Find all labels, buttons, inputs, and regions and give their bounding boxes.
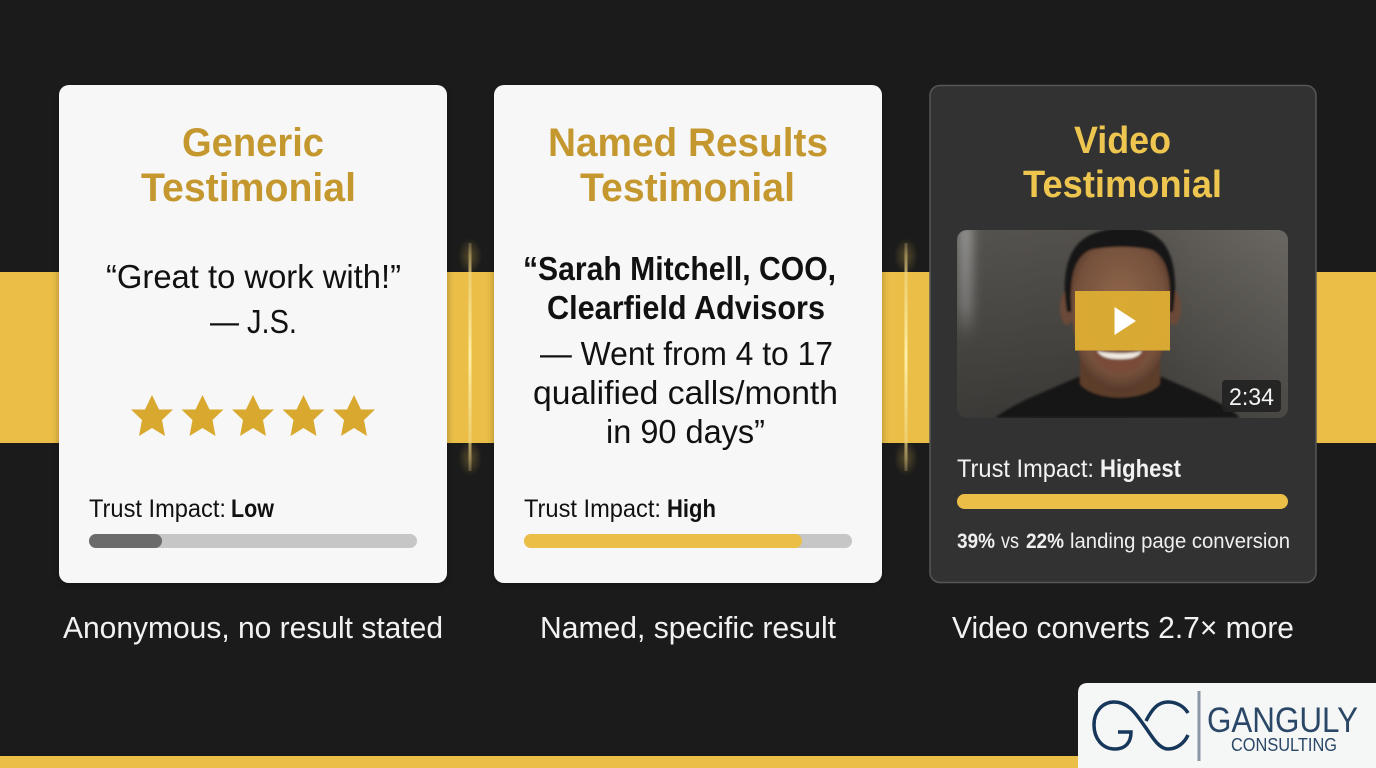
heading: named results testimonial: Testimonial [580, 166, 795, 210]
quote: great to work with [106, 258, 401, 340]
quote: great to work with: “Great to work with!” [106, 258, 401, 295]
logo divider [1198, 691, 1200, 761]
caption: generic: Anonymous, no result stated [63, 610, 443, 645]
icon: play button [1075, 291, 1170, 350]
logo wordmark: GANGULY [1207, 701, 1358, 740]
panel: named results testimonial [494, 85, 882, 583]
heading: named results testimonial [548, 121, 828, 210]
duration badge [1222, 380, 1281, 412]
conversion statistic [957, 530, 1290, 553]
logo wordmark: CONSULTING [1231, 735, 1337, 755]
connector glow between cards 1 and 2 [458, 238, 482, 476]
trust impact label: highest: Trust Impact: [957, 455, 1094, 483]
heading: generic testimonial: Generic [182, 121, 324, 165]
trust bar: highest [957, 494, 1288, 509]
icon: five stars [131, 395, 375, 436]
heading: video testimonial: Video [1074, 120, 1171, 162]
conversion statistic: 39% [957, 530, 995, 553]
quote: sarah mitchell: — Went from 4 to 17 [540, 335, 833, 372]
conversion statistic: landing page conversion [1070, 530, 1290, 553]
heading: named results testimonial: Named Results [548, 121, 828, 165]
trust impact label: highest [957, 455, 1182, 483]
heading: generic testimonial [141, 121, 356, 210]
logo wordmark [1207, 701, 1358, 755]
heading: video testimonial [1023, 120, 1222, 206]
heading: video testimonial: Testimonial [1023, 164, 1222, 206]
quote: sarah mitchell [523, 250, 838, 450]
panel: generic testimonial [59, 85, 447, 583]
quote: sarah mitchell: in 90 days” [606, 413, 765, 450]
caption: named: Named, specific result [540, 610, 836, 645]
trust bar: low [89, 534, 417, 548]
conversion statistic: 22% [1026, 530, 1064, 553]
quote: sarah mitchell: Clearfield Advisors [547, 289, 825, 326]
horizontal gold band [0, 272, 1376, 443]
connector glow between cards 2 and 3 [894, 238, 918, 476]
logo: ganguly consulting [1078, 683, 1376, 768]
trust bar: high [524, 534, 852, 548]
trust impact label: high: Trust Impact: [524, 495, 661, 523]
duration badge: 2:34 [1229, 384, 1274, 411]
bottom gold strip [0, 756, 1090, 768]
quote: sarah mitchell: “Sarah Mitchell, COO, [523, 250, 836, 287]
trust impact label: low: Low [231, 495, 274, 523]
quote: great to work with: — J.S. [210, 303, 297, 340]
video thumbnail [957, 225, 1288, 418]
quote: sarah mitchell: qualified calls/month [533, 374, 838, 411]
trust impact label: highest: Highest [1100, 455, 1182, 483]
caption: video: Video converts 2.7× more [952, 610, 1294, 645]
heading: generic testimonial: Testimonial [141, 166, 356, 210]
conversion statistic: vs [1001, 530, 1019, 553]
trust impact label: high: High [667, 495, 716, 523]
trust impact label: low: Trust Impact: [89, 495, 226, 523]
panel: video testimonial [930, 86, 1316, 582]
icon: infinity GC mark [1094, 702, 1188, 749]
